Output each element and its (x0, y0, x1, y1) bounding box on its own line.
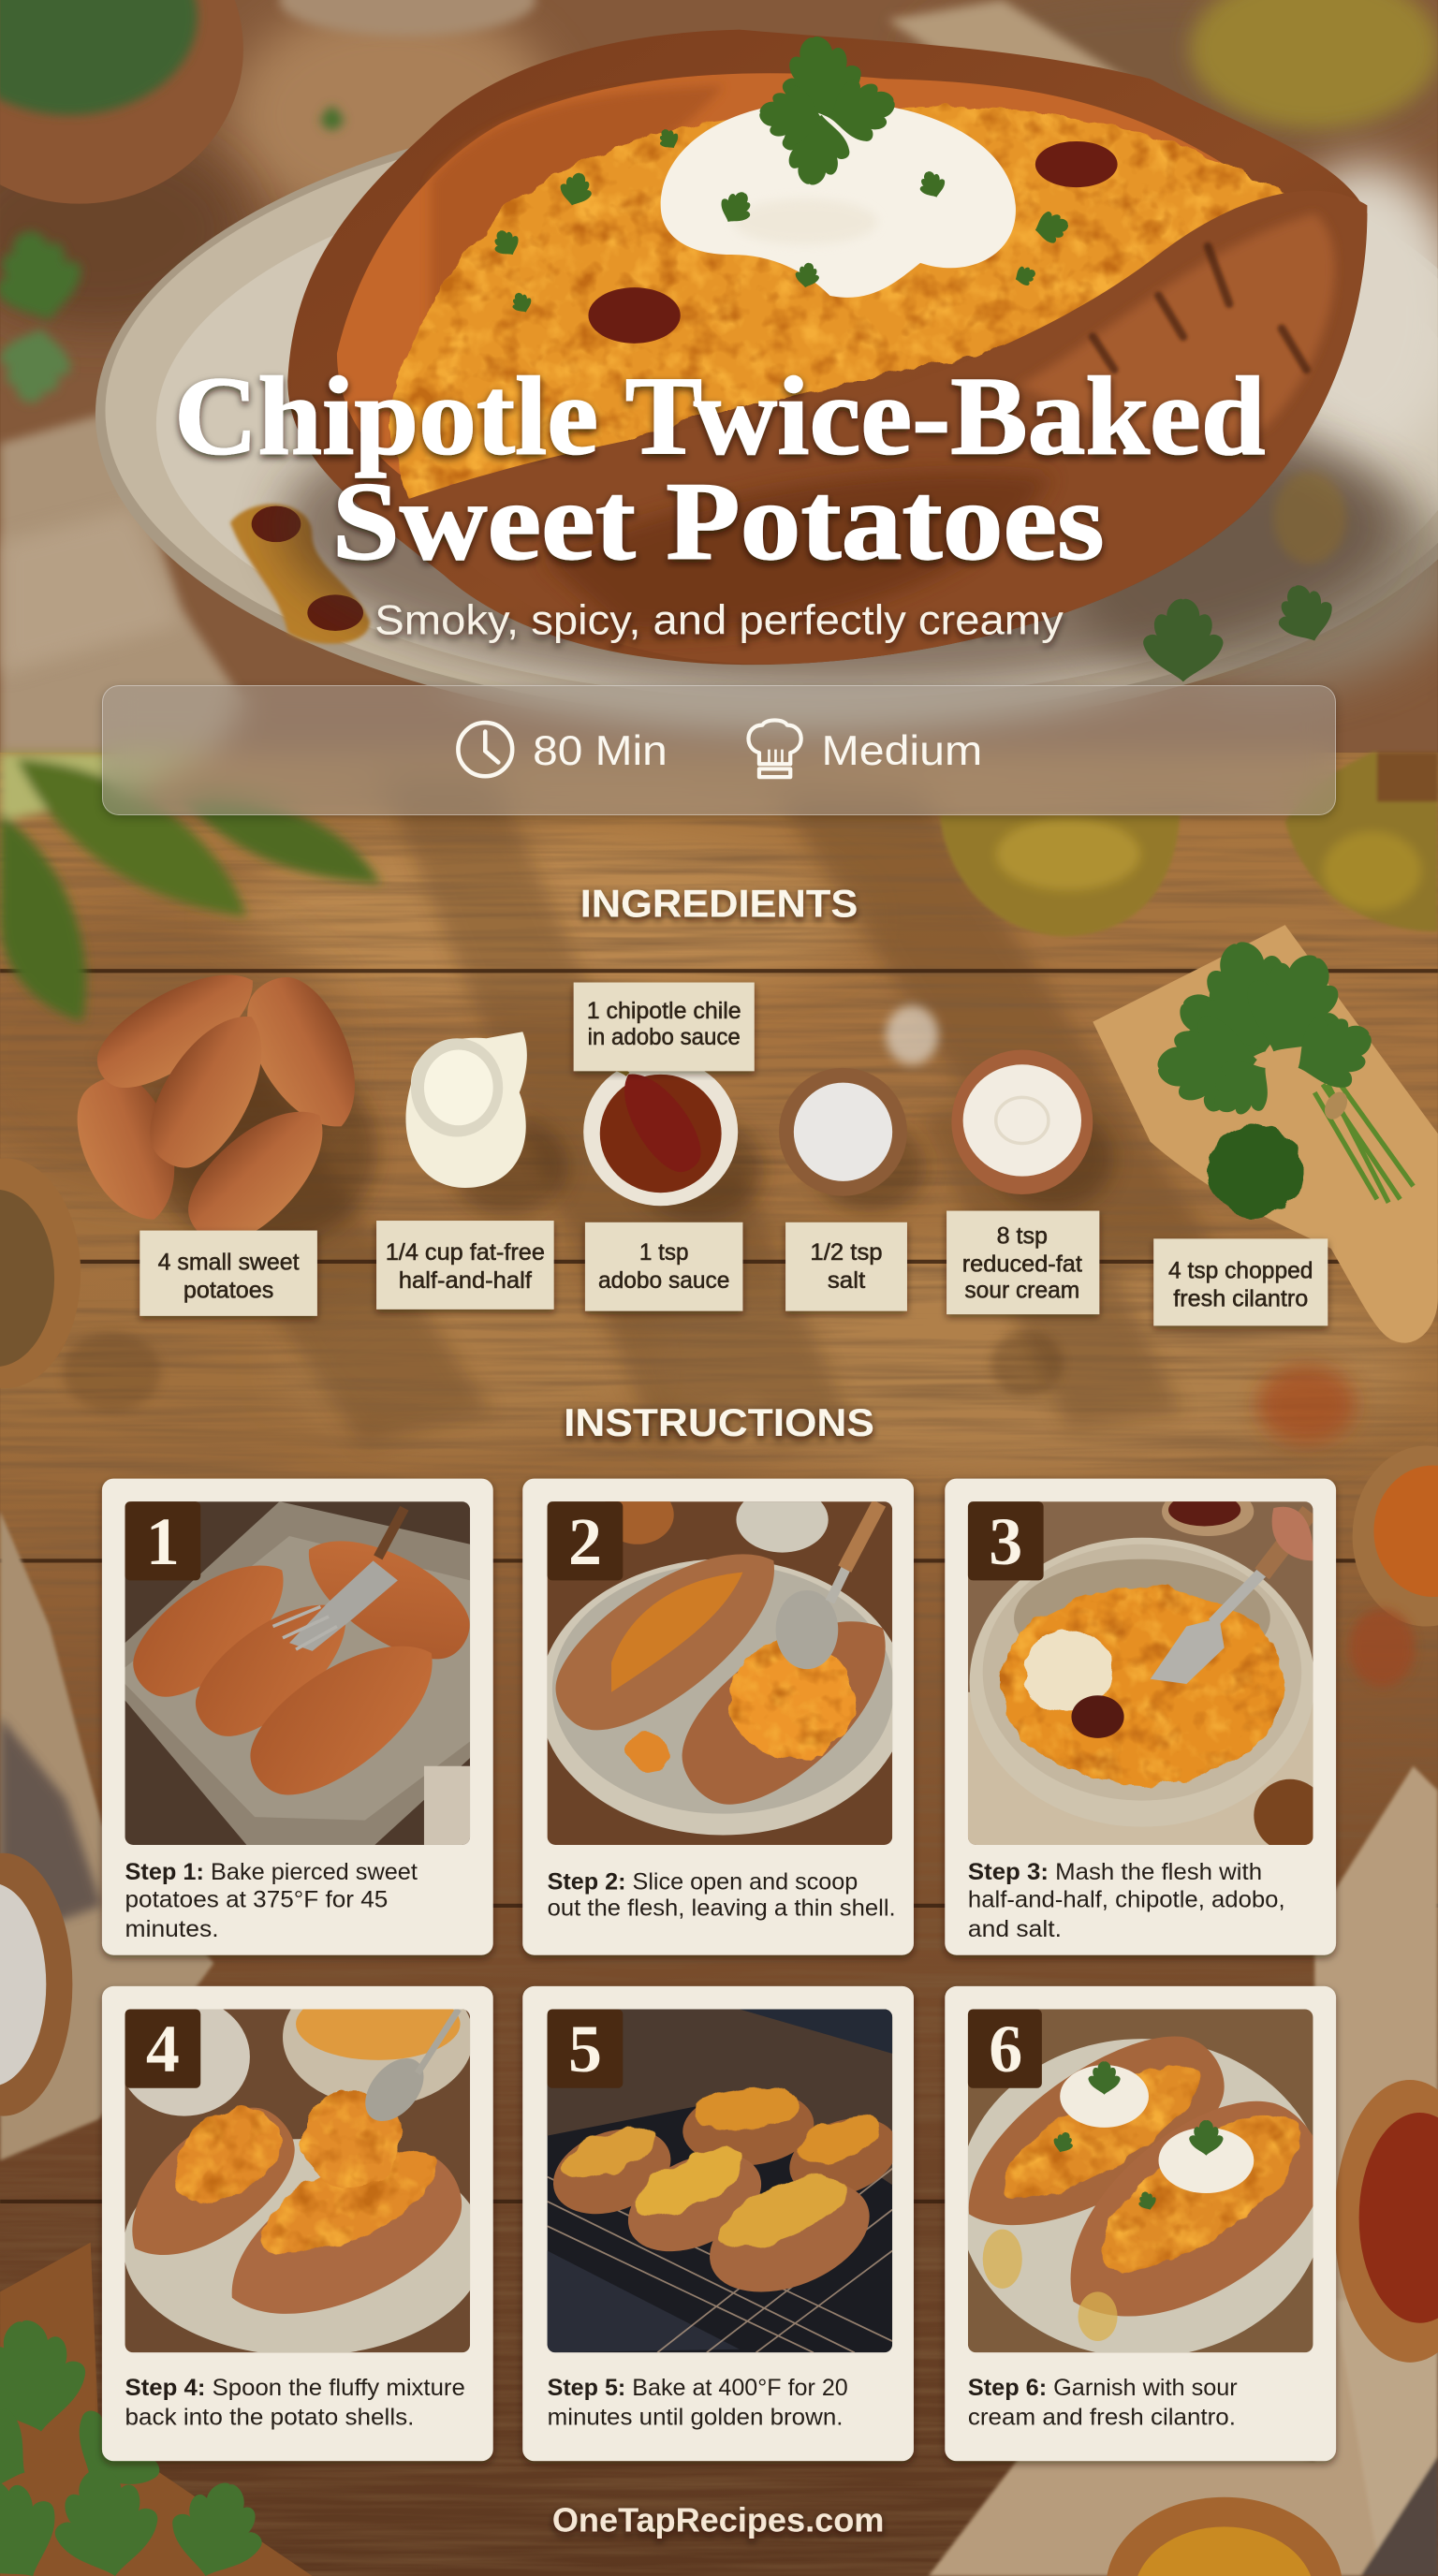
ingredient: salt bowl (779, 1068, 907, 1196)
step 4 text: Step 4: Spoon the fluffy mixture (125, 2375, 465, 2401)
step 2 text: out the flesh, leaving a thin shell. (548, 1895, 896, 1921)
table props: red spice bowl (1334, 2080, 1438, 2363)
step 3 text (968, 1859, 1285, 1942)
title (174, 354, 1266, 583)
plate (95, 94, 1438, 735)
cilantro garnish (488, 29, 1071, 316)
step 6 text (968, 2375, 1238, 2431)
step 4 photo (102, 1969, 485, 2356)
step 2 text (548, 1868, 896, 1921)
ingredient labels (139, 983, 1328, 1325)
ingredient: cutting board with cilantro (1093, 925, 1438, 1343)
label: chipotle chile: 1 chipotle chile (587, 998, 741, 1024)
step 5 number badge: 5 (568, 2012, 602, 2086)
label: sweet potatoes: 4 small sweet (158, 1250, 300, 1276)
table props: left linen (0, 1512, 213, 2160)
label: adobo sauce (585, 1222, 742, 1311)
ingredient: chipotle in adobo bowl (579, 1058, 738, 1206)
ingredient: sweet potatoes (62, 950, 380, 1263)
step 3 text: Step 3: Mash the flesh with (968, 1859, 1262, 1885)
step 6 text: Step 6: Garnish with sour (968, 2375, 1238, 2401)
step card 4 (102, 1969, 493, 2461)
step 6 text: cream and fresh cilantro. (968, 2405, 1236, 2431)
step card 2 (522, 1479, 921, 1955)
seed bowl left (0, 1158, 81, 1388)
step 1 text: Step 1: Bake pierced sweet (125, 1859, 418, 1885)
table props: paprika bowl (1349, 1445, 1438, 1687)
label: sour cream: 8 tsp (997, 1223, 1048, 1250)
time and difficulty bar (102, 685, 1336, 815)
scattered salt (886, 1005, 938, 1064)
ingredient: half-and-half jug (405, 1032, 527, 1188)
label: half-and-half (376, 1221, 554, 1310)
table props: salt bowl (0, 1853, 72, 2116)
label: sweet potatoes: potatoes (183, 1278, 273, 1304)
section heading: ingredients: INGREDIENTS (580, 881, 858, 925)
label: salt (785, 1222, 907, 1311)
label: sour cream: sour cream (964, 1278, 1079, 1304)
label: chipotle chile: in adobo sauce (588, 1024, 741, 1050)
table props: right linen (929, 1766, 1438, 2576)
step 3 number badge: 3 (989, 1504, 1022, 1579)
mashed flesh (392, 107, 1290, 501)
label: adobo sauce: adobo sauce (598, 1267, 729, 1294)
step 5 text: minutes until golden brown. (548, 2405, 844, 2431)
herbs on plate right (1143, 577, 1341, 681)
label: half-and-half: 1/4 cup fat-free (386, 1239, 545, 1266)
step 6 number badge: 6 (989, 2012, 1022, 2086)
hero photo: twice-baked sweet potato on a plate (0, 0, 1438, 753)
loose cilantro left (0, 107, 344, 408)
step 4 number badge (125, 2009, 200, 2088)
label: cilantro: 4 tsp chopped (1168, 1257, 1313, 1283)
time text: 80 Min (533, 728, 668, 774)
linen top right (888, 0, 1127, 73)
sour cream dollop (661, 101, 1016, 298)
section heading: instructions: INSTRUCTIONS (564, 1400, 874, 1444)
step 6 photo (935, 2006, 1357, 2366)
label: cilantro: fresh cilantro (1173, 1285, 1308, 1311)
label: cilantro (1153, 1238, 1328, 1325)
step 3 photo (968, 1486, 1327, 1852)
potato skin (287, 30, 1367, 665)
step 3 number badge (968, 1501, 1044, 1580)
label: salt: 1/2 tsp (810, 1239, 883, 1266)
label: salt: salt (828, 1267, 865, 1294)
label: chipotle chile (574, 983, 755, 1071)
olive oil jars (940, 753, 1438, 936)
seeds scatter (63, 1332, 161, 1412)
title: Sweet Potatoes (332, 460, 1105, 583)
step 3 text: and salt. (968, 1916, 1062, 1942)
table props: cutting board bottom left (0, 2243, 313, 2576)
step 4 text (125, 2375, 465, 2431)
top left bowl of herbs (0, 0, 243, 204)
step 1 text (125, 1859, 418, 1942)
step 5 photo (541, 2009, 908, 2352)
potato inner top lip (337, 73, 1225, 493)
step 2 number badge (548, 1501, 623, 1580)
blurred leaves top left (0, 753, 381, 1022)
linen under plate (0, 411, 246, 753)
potato front lip (403, 191, 1367, 665)
icon: clock (458, 723, 512, 776)
step 3 text: half-and-half, chipotle, adobo, (968, 1887, 1285, 1913)
difficulty text: Medium (822, 728, 982, 774)
step 2 number badge: 2 (568, 1504, 602, 1579)
ingredient shadows (148, 1051, 1114, 1249)
step card 6 (935, 1986, 1357, 2461)
step 1 number badge: 1 (146, 1504, 180, 1579)
label: sweet potatoes (139, 1231, 317, 1316)
icon: chef hat (749, 720, 801, 777)
chile pieces (588, 141, 1118, 344)
step 4 number badge: 4 (146, 2012, 180, 2086)
step 1 number badge (125, 1501, 200, 1580)
step 1 text: minutes. (125, 1916, 219, 1942)
subtitle: Smoky, spicy, and perfectly creamy (374, 596, 1064, 643)
chilli powder pile (1257, 1365, 1356, 1444)
wooden table background (0, 753, 1438, 2576)
oil jar top (1190, 0, 1438, 128)
step 2 photo (532, 1486, 921, 1845)
step card 1 (102, 1479, 493, 1955)
step 4 text: back into the potato shells. (125, 2405, 414, 2431)
step card 5 (522, 1986, 914, 2461)
step card 3 (945, 1479, 1336, 1955)
label: half-and-half: half-and-half (399, 1267, 532, 1294)
table props: cilantro bottom left (0, 2312, 274, 2576)
step 1 photo (115, 1501, 486, 1845)
step 5 text: Step 5: Bake at 400°F for 20 (548, 2375, 848, 2401)
chipotle sauce splash (230, 472, 1346, 644)
step 1 text: potatoes at 375°F for 45 (125, 1887, 388, 1913)
label: sour cream: reduced-fat (962, 1251, 1082, 1277)
potato shadow (280, 361, 1397, 690)
label: sour cream (946, 1211, 1099, 1314)
step 6 number badge (968, 2009, 1042, 2088)
label: adobo sauce: 1 tsp (639, 1239, 689, 1266)
step 2 text: Step 2: Slice open and scoop (548, 1868, 858, 1895)
step 5 text (548, 2375, 848, 2431)
step 5 number badge (548, 2009, 623, 2088)
title: Chipotle Twice-Baked (174, 354, 1266, 477)
footer website: OneTapRecipes.com (552, 2501, 884, 2539)
table props: turmeric bowl (1106, 2497, 1343, 2576)
ingredient: sour cream bowl (951, 1050, 1093, 1194)
